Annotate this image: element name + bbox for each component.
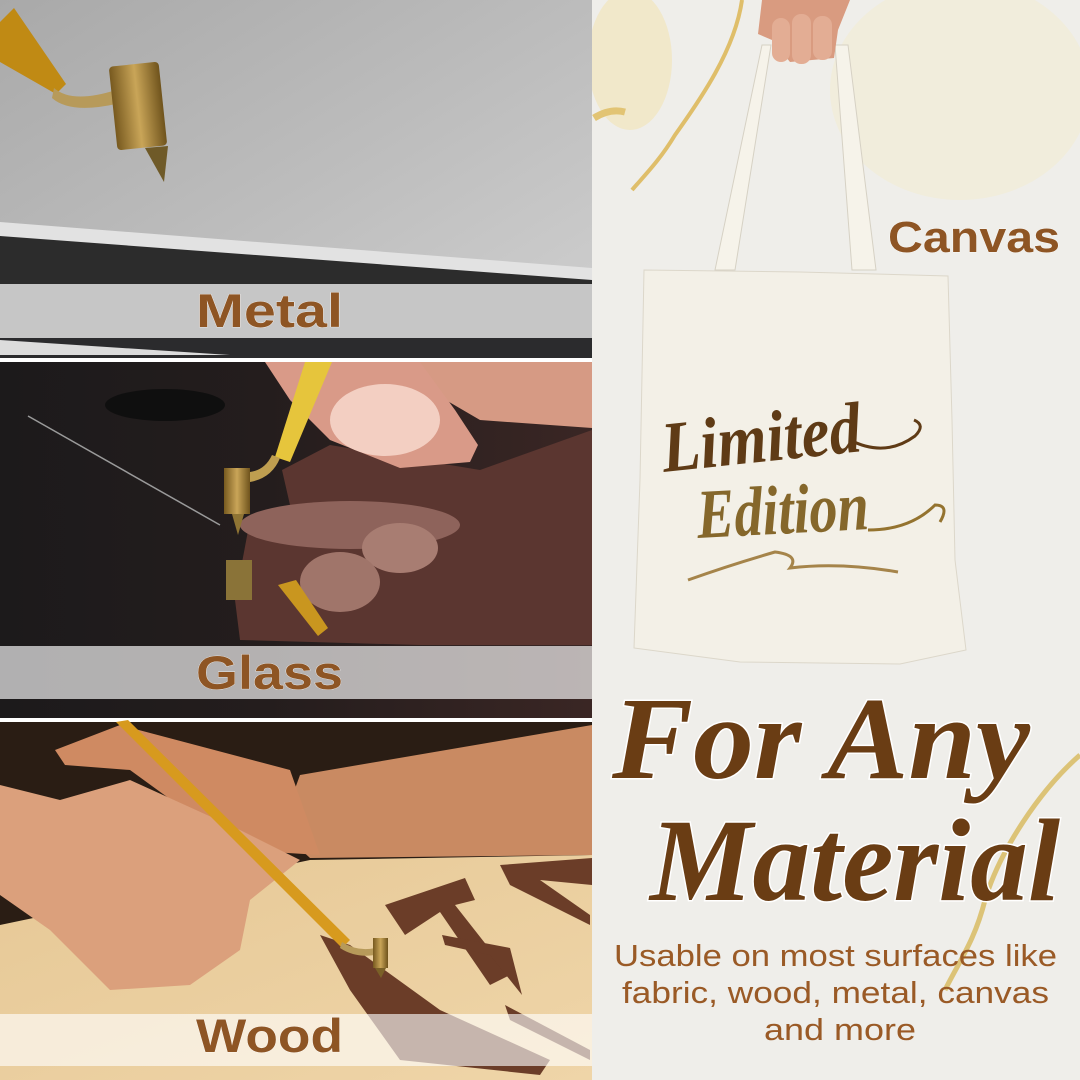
panel: wood [0, 720, 592, 1080]
label strip: metal [0, 284, 592, 338]
description text: Usable on most surfaces like [614, 938, 1057, 973]
description text: fabric, wood, metal, canvas [622, 975, 1049, 1010]
arms [280, 725, 592, 858]
hand reflection [235, 430, 592, 645]
title: Material [648, 795, 1060, 926]
label: canvas: Canvas [888, 213, 1060, 262]
label strip: wood [0, 1009, 592, 1066]
icon: engraving pen on wood [116, 720, 388, 978]
label strip: wood: Wood [196, 1009, 343, 1062]
bag print: Limited Edition: Edition [694, 468, 871, 554]
description text [614, 938, 1057, 1047]
photo: tote bag [634, 0, 966, 664]
icon: engraving pen on glass [224, 362, 332, 636]
bag print: Limited Edition: Limited [656, 387, 865, 488]
burned letters [320, 858, 592, 1075]
label strip: glass: Glass [196, 646, 343, 699]
bag print: Limited Edition [656, 387, 944, 580]
hand [758, 0, 850, 64]
label strip: metal: Metal [196, 284, 343, 337]
panel: metal [0, 0, 592, 358]
title: For Any [611, 673, 1031, 804]
bag body [634, 270, 966, 664]
background: canvas panel [588, 0, 1080, 1080]
title [611, 673, 1060, 926]
bag handles [715, 45, 771, 270]
label strip: glass [0, 646, 592, 699]
panel: glass [0, 362, 592, 718]
hand [410, 362, 592, 428]
description text: and more [764, 1012, 916, 1047]
icon: engraving pen on metal [0, 8, 168, 182]
